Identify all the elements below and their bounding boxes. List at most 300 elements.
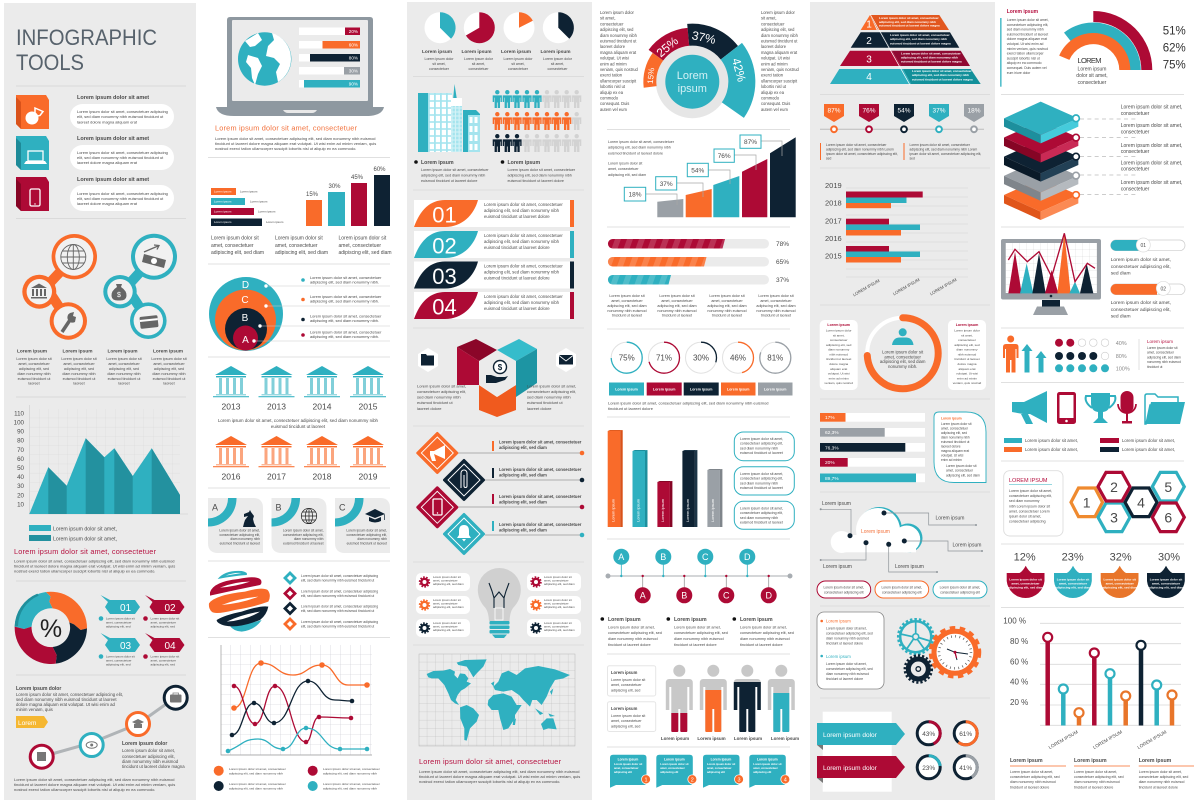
percent drops: adipiscing elit, sed diam bbox=[1008, 586, 1044, 590]
captions bbox=[820, 143, 981, 160]
pie charts bbox=[422, 12, 574, 71]
monitor chart bbox=[1001, 233, 1101, 315]
text pills: Lorem ipsum dolor sit amet bbox=[77, 95, 149, 101]
pie captions: Lorem ipsum dolor bbox=[425, 57, 454, 61]
text pills: elit, sed diam nonummy nibh euismod tincidunt ut bbox=[77, 196, 164, 201]
text: right column bbox=[761, 10, 799, 112]
pie captions: Lorem ipsum bbox=[501, 49, 531, 55]
captions under buildings: euismod tincidunt ut laoreet dolore bbox=[421, 179, 477, 183]
outlined pills: Lorem ipsum dolor sit amet, bbox=[823, 586, 864, 590]
text: left column: laoreet dolore bbox=[600, 44, 626, 49]
chart: nested circles: Lorem ipsum dolor sit amet, consectetuer bbox=[310, 294, 382, 299]
text footer: nostrud exerci tation ullamcorper suscipit lobortis nisl ut aliquip ex ea commodo. bbox=[14, 787, 155, 792]
icon: light bulb bbox=[478, 568, 521, 638]
timeline A B C D: A bbox=[618, 552, 624, 562]
list: diamonds: elit, sed diam nonummy nibh euismod tincidunt ut bbox=[301, 624, 374, 628]
callouts: 54% bbox=[691, 167, 705, 174]
side card left: sit amet, bbox=[833, 333, 845, 337]
card C: euismod tincidunt ut laoreet bbox=[347, 542, 387, 546]
chart legend: Lorem ipsum dolor sit amet, consectetuer bbox=[229, 767, 286, 771]
two text cards: Lorem ipsum bbox=[611, 706, 638, 711]
icon: crimson cube phone bbox=[16, 177, 49, 211]
diamond list: adipiscing elit, sed diam bbox=[499, 445, 547, 450]
slider 02 bbox=[1111, 281, 1185, 320]
text block: tincidunt ut laoreet dolore bbox=[608, 406, 654, 411]
text lower: Lorem ipsum dolor sit amet, bbox=[122, 748, 175, 753]
captions: Lorem ipsum dolor sit amet, consectetuer bbox=[826, 143, 887, 147]
lollipop chart bbox=[1003, 616, 1181, 750]
icon: megaphone bbox=[1012, 391, 1047, 424]
text block: nostrud exerci tation ullamcorper suscipit lobortis nisl ut aliquip ex ea commodo. bbox=[419, 779, 560, 784]
side card right bbox=[948, 320, 986, 390]
text: left column: sit amet, bbox=[600, 16, 615, 21]
icons: orange banks with years: 2018 bbox=[313, 472, 332, 482]
bubble 1: Lorem ipsum bbox=[618, 758, 638, 762]
text left: sed diam nonummy nibh bbox=[417, 394, 461, 400]
text: left column: exerci tation bbox=[600, 73, 623, 78]
timeline A B C D: B bbox=[681, 590, 687, 600]
callout card: volutpat. Ut wisi bbox=[941, 454, 964, 458]
semi arc chart: 62% bbox=[1163, 42, 1186, 54]
text: three footers: tincidunt ut laoreet dolore bbox=[1074, 786, 1113, 790]
text: three captions: consectetuer adipiscing elit, sed bbox=[608, 631, 662, 635]
horizontal bar chart by year: LOREM IPSUM bbox=[852, 278, 881, 297]
bar crimson bbox=[657, 481, 672, 527]
diamond list bbox=[418, 434, 584, 554]
text right: Lorem ipsum dolor sit amet, bbox=[527, 384, 576, 388]
horizontal bar chart by year bbox=[825, 181, 968, 297]
text pills: laoreet dolore magna aliquam erat bbox=[77, 201, 138, 206]
text with side bar: consequat. Duis autem vel bbox=[1007, 66, 1047, 70]
pie captions: Lorem ipsum dolor bbox=[504, 57, 533, 61]
layer stack: Lorem ipsum dolor sit amet, bbox=[1121, 160, 1182, 166]
pyramid: 4 bbox=[866, 72, 872, 83]
chart: nested circles: Lorem ipsum dolor sit amet, consectetuer bbox=[310, 314, 382, 318]
pie captions: consectetuer bbox=[429, 67, 450, 71]
percentage bars: 89,7% bbox=[825, 476, 839, 482]
text: four column captions: amet, consectetuer bbox=[18, 362, 50, 366]
gear list right: amet, consectetuer bbox=[544, 602, 569, 606]
callout card: laoreet dolore bbox=[941, 444, 961, 448]
gear list left: Lorem ipsum dolor sit bbox=[433, 575, 461, 579]
text card: consectetuer adipiscing elit, sed bbox=[826, 632, 873, 636]
panel: column 6 bbox=[1000, 9, 1194, 790]
ring labels: Lorem ipsum bbox=[615, 388, 638, 392]
stats row: amet, consectetuer bbox=[1147, 351, 1175, 355]
text left: laoreet dolore bbox=[417, 406, 442, 411]
text: right column: ullamcorper suscipit bbox=[761, 78, 798, 83]
horizontal bar chart by year: 2015 bbox=[825, 252, 842, 260]
card B bbox=[272, 498, 326, 553]
percent rings bbox=[609, 342, 792, 396]
text block: nostrud exerci tation ullamcorper suscipit lobortis nisl ut aliquip ex ea commodo. bbox=[215, 146, 356, 151]
timeline A B C D: A bbox=[640, 590, 646, 600]
text card: consectetuer adipiscing elit, sed bbox=[826, 667, 873, 671]
side card left: tincidunt ut laoreet bbox=[826, 357, 851, 361]
ribbon 04: Lorem ipsum dolor sit amet, consectetuer bbox=[484, 294, 563, 299]
layer stack: consectetuer bbox=[1121, 166, 1150, 172]
text block: tincidunt ut laoreet dolore magna aliquam erat volutpat. Ut wisi enim ad minim veniam, quis bbox=[419, 774, 580, 779]
horizontal bar chart by year: LOREM IPSUM bbox=[892, 277, 921, 296]
navy gear bbox=[905, 656, 932, 682]
horizontal bar chart by year: 2017 bbox=[825, 216, 842, 226]
slider 02: Lorem ipsum dolor sit amet, bbox=[1111, 300, 1171, 306]
text: left column: magna aliquam erat bbox=[600, 50, 637, 55]
lollipop chart: 80 % bbox=[1010, 637, 1028, 646]
ribbon 04: adipiscing elit, sed diam nonummy nibh bbox=[484, 300, 560, 305]
arrow 03: amet, consectetuer bbox=[106, 658, 132, 662]
callout card: adipiscing elit, sed bbox=[941, 431, 967, 435]
callout card: Lorem ipsum bbox=[941, 416, 962, 420]
callout boxes: sed diam nonummy nibh bbox=[740, 446, 778, 450]
text upper: minim veniam, quis bbox=[16, 707, 53, 712]
layer stack: consectetuer bbox=[1121, 149, 1150, 155]
bubble 3: adipiscing elit bbox=[707, 770, 725, 774]
chart legend: Lorem ipsum dolor sit amet, consectetuer bbox=[229, 782, 286, 786]
bubble 3: Lorem ipsum dolor sit bbox=[707, 762, 735, 766]
text: three captions: consectetuer adipiscing elit, sed bbox=[674, 631, 728, 635]
percent drops: amet, consectetuer bbox=[1059, 582, 1088, 586]
captions under buildings: Lorem ipsum bbox=[421, 160, 454, 166]
panel: column 5 bbox=[810, 2, 995, 800]
two text cards bbox=[608, 666, 656, 732]
panel: column 1 bbox=[4, 3, 196, 800]
human figures bbox=[661, 665, 799, 741]
side card right: Lorem ipsum dolor bbox=[954, 328, 980, 332]
stats row bbox=[1003, 336, 1181, 372]
semi arc chart: Lorem ipsum bbox=[1078, 66, 1106, 72]
label tag bbox=[16, 716, 48, 728]
text: three captions: Lorem ipsum dolor sit amet, bbox=[608, 626, 655, 630]
sphere of bands bbox=[209, 571, 270, 632]
text: four columns: Lorem ipsum dolor sit bbox=[659, 294, 695, 298]
callout card: euismod tincidunt ut bbox=[941, 440, 969, 444]
chart: nested circles: adipiscing elit, sed diam nonummy nibh. bbox=[310, 299, 379, 304]
captions under buildings: adipiscing elit, sed diam nonummy nibh bbox=[421, 174, 485, 178]
callout boxes: sed diam nonummy nibh bbox=[740, 516, 778, 520]
text: right column: diam nonummy nibh bbox=[761, 33, 799, 38]
text: right column: volutpat. Ut wisi bbox=[761, 56, 790, 61]
text: left column: autem vel eum bbox=[600, 107, 627, 112]
orange clock gear bbox=[930, 628, 980, 677]
text: three footers: consectetuer adipiscing elit, sed bbox=[1010, 775, 1060, 779]
text pills: Lorem ipsum dolor sit amet, consectetuer adipiscing bbox=[77, 191, 168, 196]
text: four columns: Lorem ipsum dolor sit bbox=[709, 294, 745, 298]
text: three captions: Lorem ipsum dolor sit amet, bbox=[674, 626, 721, 630]
outlined pills: Lorem ipsum dolor sit amet, bbox=[881, 586, 922, 590]
pyramid: euismod tincidunt ut laoreet dolore magna bbox=[890, 41, 951, 45]
text: three footers: Lorem ipsum bbox=[1010, 758, 1043, 764]
pie captions bbox=[422, 49, 573, 71]
side card left: dolore magna bbox=[829, 362, 848, 366]
layer gray bbox=[1004, 159, 1078, 201]
arrow 01: adipiscing elit, sed bbox=[106, 624, 131, 628]
arrow 03: Lorem ipsum dolor sit bbox=[106, 654, 135, 658]
text: three footers: diam nonummy nibh euismod bbox=[1010, 780, 1056, 784]
area chart: 90 bbox=[17, 428, 25, 436]
card: lorem ipsum: ipsum dolor sit amet, bbox=[1009, 514, 1041, 518]
bubble 3: Lorem ipsum bbox=[711, 758, 731, 762]
text above stair chart: Lorem ipsum dolor sit amet, consectetuer bbox=[608, 140, 675, 144]
text above stair chart: Lorem ipsum dolor sit bbox=[608, 162, 642, 166]
heading: crimson: Lorem ipsum dolor sit amet, consectetuer bbox=[14, 547, 157, 556]
outlined pills: consectetuer adipiscing elit bbox=[940, 590, 980, 594]
icons: teal banks with years: 2014 bbox=[313, 402, 332, 412]
ribbon 01 bbox=[414, 200, 574, 228]
chart: nested circles: adipiscing elit, sed diam nonummy nibh. bbox=[310, 334, 379, 339]
text: three footers: Lorem ipsum dolor sit amet, bbox=[1139, 770, 1182, 774]
text: four columns: amet, consectetuer bbox=[711, 299, 743, 303]
ring labels: Lorem ipsum bbox=[653, 388, 675, 392]
icons: orange banks with years: 2017 bbox=[267, 472, 286, 482]
gear list left: Lorem ipsum dolor sit bbox=[433, 621, 461, 625]
text: three columns bbox=[211, 236, 392, 256]
text card: diam nonummy nibh euismod bbox=[826, 636, 869, 640]
text: four columns: adipiscing elit, sed diam bbox=[756, 304, 796, 308]
arrow 02: adipiscing elit, sed bbox=[150, 624, 175, 628]
horizontal bar chart by year: LOREM IPSUM bbox=[929, 277, 958, 296]
banner teal: Lorem ipsum dolor bbox=[823, 732, 878, 739]
slider 01: consectetuer adipiscing elit, bbox=[1111, 264, 1171, 270]
heading: crimson: Lorem ipsum dolor sit amet, consectetuer bbox=[419, 757, 562, 766]
text right: euismod tincidunt ut bbox=[527, 400, 563, 405]
text: three footers: Lorem ipsum bbox=[1139, 758, 1172, 764]
hexagon cluster: 3 bbox=[1110, 510, 1118, 526]
captions: ipsum dolor sit amet, consectetuer adipiscing elit, bbox=[826, 152, 898, 156]
icons: teal banks with years: 2015 bbox=[359, 402, 378, 412]
text card: Lorem ipsum bbox=[826, 654, 851, 659]
icon: trophy bbox=[1086, 393, 1115, 423]
pyramid: adipiscing elit, sed diam nonummy nibh bbox=[890, 37, 947, 41]
text: left column: adipiscing elit, sed bbox=[600, 27, 634, 32]
text block bbox=[608, 400, 769, 411]
text with side bar: volutpat. Ut wisi enim ad bbox=[1007, 42, 1044, 46]
text: left column: consectetuer bbox=[600, 21, 624, 26]
callout boxes: sed diam nonummy nibh bbox=[740, 481, 778, 485]
outlined pills bbox=[817, 581, 987, 598]
text pills: Lorem ipsum dolor sit amet, consectetuer adipiscing bbox=[77, 150, 168, 155]
radial chart: ipsum bbox=[678, 83, 707, 95]
text: three footers: consectetuer adipiscing elit, sed bbox=[1074, 775, 1124, 779]
ribbon 02: 02 bbox=[432, 234, 457, 258]
text: three captions bbox=[600, 617, 794, 647]
chart legend: adipiscing elit, sed diam nonummy nibh bbox=[323, 786, 377, 790]
pie captions: sit amet, bbox=[511, 62, 525, 66]
bubble 2: 2 bbox=[691, 777, 694, 783]
two text cards: Lorem ipsum bbox=[611, 670, 638, 675]
banner crimson: Lorem ipsum dolor bbox=[823, 765, 878, 772]
gear list right: Lorem ipsum dolor sit bbox=[544, 598, 572, 602]
ring labels: Lorem ipsum bbox=[690, 388, 712, 392]
ring labels bbox=[609, 382, 792, 396]
outlined pills: Lorem ipsum dolor sit amet, bbox=[940, 586, 980, 590]
percent rings: 81% bbox=[767, 354, 783, 362]
list: diamonds bbox=[285, 573, 378, 629]
stats row: nonummy nibh euismod bbox=[1147, 360, 1181, 364]
ribbon 04: euismod tincidunt ut laoreet dolore bbox=[484, 306, 550, 311]
percent drops: Lorem ipsum dolor sit bbox=[1057, 578, 1089, 582]
heading: orange: Lorem ipsum dolor sit amet, consectetuer bbox=[215, 124, 358, 132]
legend bbox=[1004, 438, 1175, 452]
callouts: 37% bbox=[660, 181, 673, 188]
text: four column captions: laoreet bbox=[163, 382, 175, 386]
text: four column captions: amet, consectetuer bbox=[153, 362, 185, 366]
text: four columns: adipiscing elit, sed diam bbox=[607, 304, 647, 308]
percent drops: Lorem ipsum dolor sit bbox=[1150, 578, 1182, 582]
lollipop chart: 60 % bbox=[1010, 658, 1028, 666]
pyramid: adipiscing elit, sed diam nonummy nibh bbox=[901, 56, 958, 60]
ribbon 04 bbox=[414, 292, 574, 320]
text pills: laoreet dolore magna aliquam erat bbox=[77, 160, 138, 165]
gear list right: Lorem ipsum dolor sit bbox=[544, 621, 572, 625]
cloud diagram bbox=[820, 501, 983, 573]
percent drops: 23% bbox=[1062, 552, 1084, 564]
text: right column: veniam, quis nostrud bbox=[761, 67, 799, 72]
bubble 2 bbox=[656, 755, 697, 788]
text: three captions: Lorem ipsum bbox=[608, 617, 641, 623]
pyramid: 3 bbox=[866, 54, 872, 66]
area chart: 30 bbox=[17, 483, 25, 490]
text right bbox=[527, 384, 576, 411]
chart: vertical bars: 15% bbox=[306, 192, 319, 198]
diagram: teal connected circles bbox=[103, 234, 177, 339]
text: three footers: tincidunt ut laoreet dolore bbox=[1010, 786, 1049, 790]
side card left: adipiscing elit, sed bbox=[826, 343, 852, 347]
bar crimson: Lorem ipsum bbox=[660, 498, 665, 522]
card: lorem ipsum bbox=[1004, 471, 1063, 536]
ribbon 01: euismod tincidunt ut laoreet dolore bbox=[484, 214, 550, 219]
arrow 04: adipiscing elit, sed bbox=[150, 662, 175, 666]
chart: horizontal bars: Lorem ipsum bbox=[214, 200, 232, 204]
text: four column captions: laoreet bbox=[28, 382, 40, 386]
text with side bar: exerci tation ullamcorper bbox=[1007, 52, 1045, 56]
layer stack: consectetuer bbox=[1121, 130, 1150, 136]
cloud diagram: Lorem ipsum bbox=[822, 501, 851, 507]
text: left column: volutpat. Ut wisi bbox=[600, 56, 629, 61]
arrow 02: 02 bbox=[164, 603, 176, 614]
side card right: enim ad minim bbox=[957, 376, 977, 380]
line chart bbox=[214, 645, 380, 791]
text: three captions: tincidunt ut laoreet dolore bbox=[674, 643, 717, 647]
gears and clock bbox=[898, 619, 980, 682]
text: four column captions: Lorem ipsum bbox=[107, 348, 138, 354]
icon row bbox=[1012, 391, 1185, 424]
text with side bar: minim veniam, quis nostrud bbox=[1007, 47, 1048, 51]
captions: Lorem ipsum dolor sit amet, consectetuer bbox=[910, 143, 971, 147]
side card left: nibh euismod bbox=[829, 352, 848, 356]
percent rings: 71% bbox=[656, 354, 672, 362]
pyramid: euismod tincidunt ut laoreet dolore magna bbox=[912, 78, 973, 82]
progress bars: 37% bbox=[776, 277, 789, 284]
text: four column captions: amet, consectetuer bbox=[108, 362, 140, 366]
chart: horizontal bars: Lorem ipsum bbox=[214, 190, 232, 194]
gear list right: adipiscing elit, sed diam bbox=[544, 582, 575, 586]
card: lorem ipsum: nibh Lorem ipsum dolor sit bbox=[1009, 504, 1050, 508]
text: centered caption: Lorem ipsum dolor sit amet, consectetuer adipiscing elit, sed diam nonummy nibh bbox=[218, 418, 379, 423]
percent drops: 32% bbox=[1110, 552, 1132, 564]
captions: adipiscing elit, sed diam nonummy nibh Lorem bbox=[826, 148, 894, 152]
ring labels: Lorem ipsum bbox=[764, 388, 786, 392]
small rings bbox=[917, 722, 977, 779]
lollipop chart: LOREM IPSUM bbox=[1048, 729, 1079, 750]
percent rings: 46% bbox=[730, 354, 746, 362]
callout card: Lorem ipsum dolor sit bbox=[946, 464, 977, 468]
arrow 01: 01 bbox=[120, 603, 131, 614]
captions under buildings: euismod tincidunt ut laoreet dolore bbox=[508, 179, 564, 183]
arrow 04: 04 bbox=[164, 641, 176, 652]
callout card: magna aliquam erat bbox=[941, 449, 969, 453]
chart: nested circles: B bbox=[242, 313, 249, 324]
text: right column: exerci tation bbox=[761, 73, 784, 78]
slider 01: sed diam bbox=[1111, 270, 1131, 276]
gear list left: amet, consectetuer bbox=[433, 602, 458, 606]
3D bar chart bbox=[608, 430, 794, 529]
layer crimson bbox=[1004, 121, 1078, 162]
ring labels: Lorem ipsum bbox=[727, 388, 749, 392]
pie captions: Lorem ipsum dolor bbox=[464, 57, 494, 61]
pie captions: sit amet, bbox=[551, 62, 564, 66]
arrow 02: amet, consectetuer bbox=[150, 620, 176, 624]
timeline A B C D bbox=[606, 549, 792, 603]
text: four column captions: Lorem ipsum bbox=[153, 348, 183, 354]
text: left column bbox=[600, 10, 638, 112]
laptop bbox=[216, 17, 384, 116]
ribbon 03: Lorem ipsum dolor sit amet, consectetuer bbox=[484, 264, 563, 268]
side card right: volutpat. Ut wisi bbox=[956, 372, 978, 376]
text with side bar: aliquip ex ea commodo bbox=[1007, 61, 1042, 65]
area chart bbox=[14, 405, 188, 542]
chart: vertical bars bbox=[306, 167, 390, 226]
gear list left: adipiscing elit, sed diam bbox=[433, 582, 464, 586]
callout card bbox=[934, 412, 986, 482]
text block: Lorem ipsum dolor sit amet, consectetuer adipiscing elit, sed diam nonummy nibh euismod bbox=[419, 769, 580, 774]
bars on screen: 20% bbox=[349, 29, 358, 34]
radial chart: 37% bbox=[691, 28, 717, 47]
ribbon 02: euismod tincidunt ut laoreet dolore bbox=[484, 245, 550, 250]
text pills: elit, sed diam nonummy nibh euismod tincidunt ut bbox=[77, 155, 164, 160]
semi arc chart: LOREM bbox=[1078, 56, 1102, 65]
text: four column captions: Lorem ipsum dolor sit bbox=[61, 357, 97, 361]
small rings: 41% bbox=[959, 765, 972, 772]
stats row: Lorem ipsum bbox=[1147, 339, 1173, 344]
text block: tincidunt ut laoreet dolore magna aliquam erat volutpat. Ut wisi enim ad minim veniam, quis bbox=[14, 564, 175, 568]
chart: nested circles: Lorem ipsum dolor sit amet, consectetuer bbox=[310, 275, 382, 280]
text: right column: autem vel eum bbox=[761, 107, 788, 112]
text: left column: Lorem ipsum dolor bbox=[600, 10, 635, 15]
chart legend: adipiscing elit, sed diam nonummy nibh bbox=[323, 772, 377, 776]
icon: city buildings bbox=[418, 84, 480, 152]
bars on screen: 30% bbox=[349, 68, 358, 74]
text card: tincidunt ut laoreet dolore bbox=[826, 677, 863, 681]
text left: consectetuer adipiscing elit, bbox=[417, 389, 466, 394]
hexagon cluster: 5 bbox=[1164, 479, 1172, 495]
pyramid: adipiscing elit, sed diam nonummy nibh bbox=[912, 73, 969, 77]
text: three columns: adipiscing elit, sed diam bbox=[338, 250, 392, 256]
icon: phone bbox=[433, 499, 442, 515]
text: three columns: adipiscing elit, sed diam bbox=[211, 250, 264, 256]
text: left column: enim ad minim bbox=[600, 61, 627, 66]
chart: nested circles: adipiscing elit, sed diam nonummy nibh. bbox=[310, 280, 379, 285]
diamond list: adipiscing elit, sed diam bbox=[499, 500, 547, 504]
bubble 4: Lorem ipsum dolor sit bbox=[753, 762, 782, 766]
pyramid: euismod tincidunt ut laoreet dolore magna bbox=[879, 24, 940, 28]
pictogram: people bbox=[493, 90, 581, 152]
chart: nested circles: D bbox=[242, 280, 249, 291]
ribbon 02 bbox=[414, 231, 574, 258]
text lower: diam nonummy nibh euismod bbox=[122, 759, 179, 764]
card B: diam nonummy nibh bbox=[294, 537, 324, 541]
callouts: 18% bbox=[628, 192, 642, 198]
